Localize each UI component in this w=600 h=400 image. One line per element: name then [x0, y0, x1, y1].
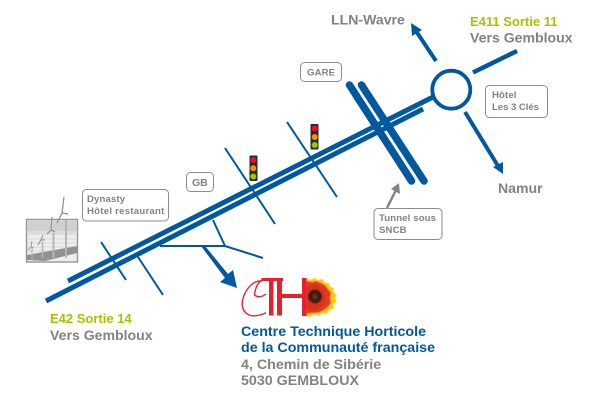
logo T and H — [262, 278, 303, 316]
label: Hôtel Les 3 Clés: Hôtel — [492, 90, 517, 101]
address block: 4, Chemin de Sibérie — [241, 357, 381, 373]
address block: 5030 GEMBLOUX — [241, 373, 359, 389]
destination: E411 Sortie 11: E411 Sortie 11 — [470, 14, 557, 29]
label: Hôtel Les 3 Clés — [486, 86, 548, 118]
destination: E42 Sortie 14: Vers Gembloux — [50, 327, 153, 343]
destination: Namur: Namur — [498, 180, 543, 196]
label: GB — [186, 172, 214, 192]
tunnel bar right — [362, 85, 424, 181]
destination: E411 Sortie 11: Vers Gembloux — [470, 30, 573, 46]
label: GARE: GARE — [307, 68, 336, 78]
destination: E42 Sortie 14 — [50, 311, 153, 343]
cross street 2 — [138, 257, 163, 295]
label: GARE — [300, 62, 342, 82]
label: Dynasty — [82, 190, 168, 221]
destination: LLN-Wavre: LLN-Wavre — [331, 12, 405, 28]
address block: de la Communauté française — [241, 340, 435, 356]
traffic light 1 — [250, 156, 258, 181]
logo: CTH flower — [242, 278, 337, 317]
label: Dynasty: Dynasty — [87, 194, 126, 205]
label: GB: GB — [192, 177, 208, 189]
address block — [241, 324, 435, 389]
logo script C — [242, 280, 266, 316]
arrow: Namur — [465, 112, 503, 174]
traffic light 2 — [310, 124, 318, 150]
icon: wind farm — [26, 197, 78, 262]
logo flower — [302, 278, 337, 317]
label: Tunnel sous SNCB: Tunnel sous — [379, 213, 436, 224]
roundabout — [432, 71, 470, 109]
tunnel bar left — [350, 85, 412, 181]
arrow: to CTH — [201, 246, 237, 288]
side branch — [160, 220, 263, 258]
cross street 4 — [287, 122, 337, 197]
cross street 1 — [101, 242, 126, 280]
label: Tunnel sous SNCB — [374, 208, 442, 240]
destination: E42 Sortie 14: E42 Sortie 14 — [50, 311, 132, 326]
cross street 3 — [225, 148, 275, 224]
road map — [46, 51, 517, 301]
address block: Centre Technique Horticole — [241, 324, 426, 340]
label: Hôtel Les 3 Clés: Les 3 Clés — [492, 102, 539, 113]
main road upper — [68, 96, 434, 281]
label: Dynasty: Hôtel restaurant — [87, 206, 165, 217]
label: Tunnel sous SNCB: SNCB — [379, 225, 407, 236]
E411 road — [473, 51, 517, 72]
arrow: LLN-Wavre — [411, 23, 436, 61]
destination: E411 Sortie 11 — [470, 14, 573, 46]
main road lower — [46, 109, 423, 301]
arrow: tunnel pointer — [387, 183, 400, 208]
